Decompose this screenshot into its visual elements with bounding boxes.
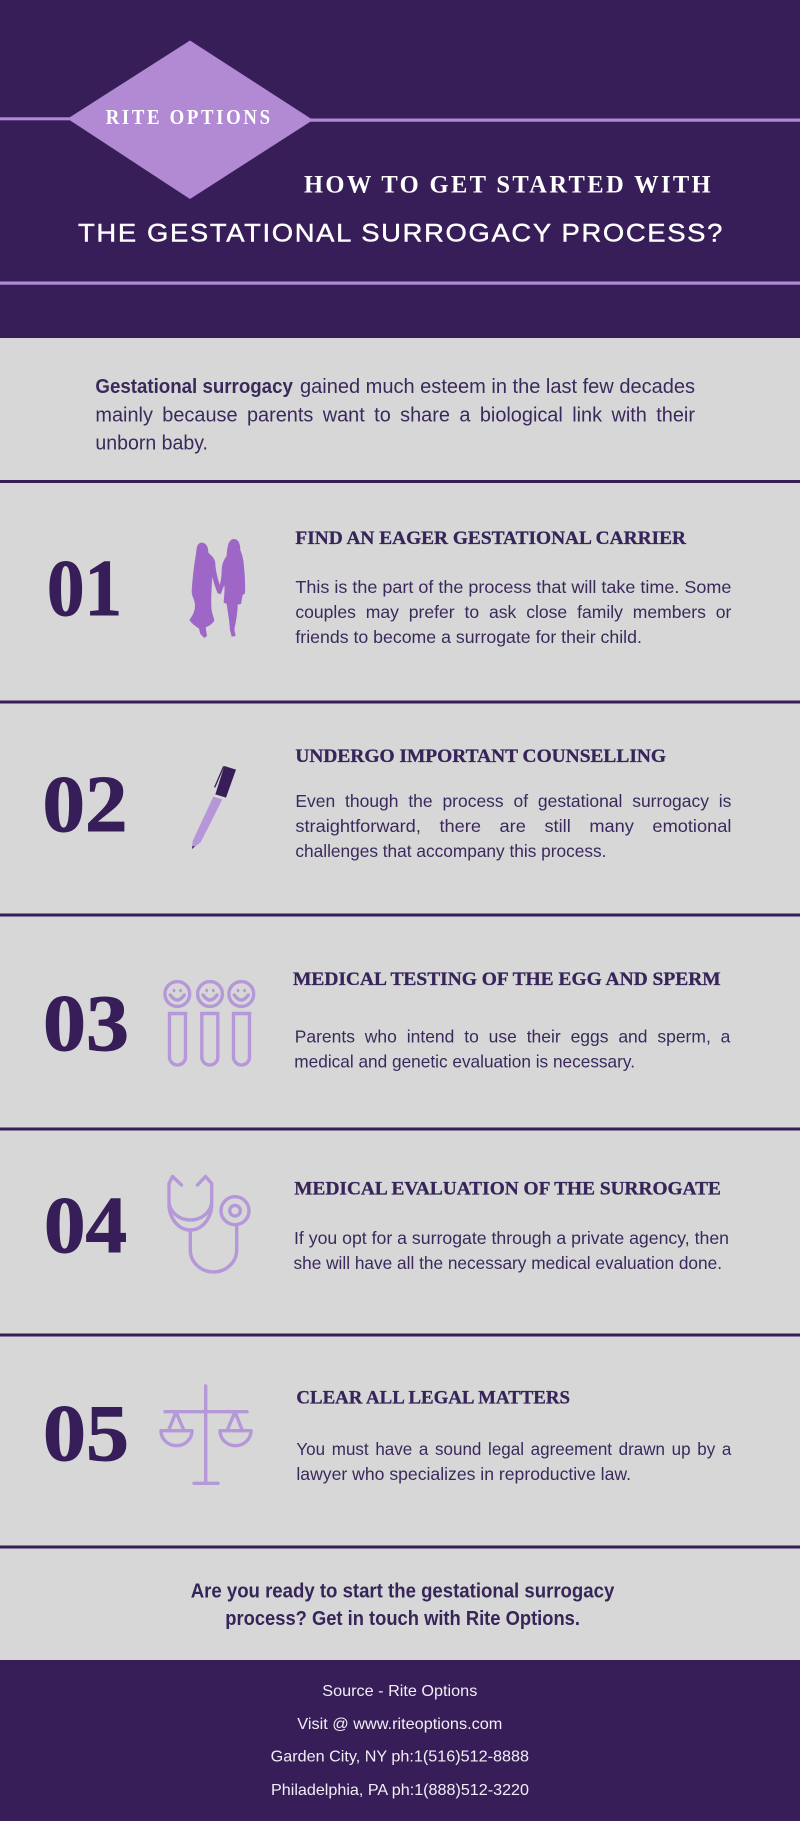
step number 01: 01 [47, 543, 122, 633]
panel: footer: Garden City, NY ph:1(516)512-8888 [271, 1749, 529, 1766]
step description [294, 1228, 729, 1273]
step number 02: 02 [42, 759, 128, 849]
logo diamond: RITE OPTIONS [106, 105, 273, 129]
step heading: FIND AN EAGER GESTATIONAL CARRIER [295, 528, 686, 549]
panel: call to action [0, 1548, 800, 1660]
icon: stethoscope [169, 1176, 249, 1272]
step description [295, 577, 732, 647]
panel: step 2 [0, 704, 800, 914]
step description: Even though the process of gestational surrogacy is [295, 791, 732, 811]
panel: step 1 [0, 483, 800, 701]
step number 04: 04 [44, 1180, 127, 1270]
icon: two women holding hands [189, 539, 245, 638]
panel: header [0, 0, 800, 338]
step description: she will have all the necessary medical evaluation done. [294, 1253, 722, 1273]
step description [294, 1026, 731, 1071]
panel: footer: Visit @ www.riteoptions.com [297, 1716, 502, 1733]
step heading: UNDERGO IMPORTANT COUNSELLING [295, 746, 666, 767]
step description: This is the part of the process that will take time. Some [295, 577, 731, 597]
panel: step 5 [0, 1336, 800, 1546]
step description: If you opt for a surrogate through a private agency, then [294, 1228, 729, 1248]
panel: footer: Philadelphia, PA ph:1(888)512-3220 [271, 1782, 529, 1799]
panel: introduction: unborn baby. [95, 432, 208, 454]
step heading: CLEAR ALL LEGAL MATTERS [296, 1388, 570, 1409]
step description: Parents who intend to use their eggs and sperm, a [295, 1026, 731, 1046]
step heading: MEDICAL TESTING OF THE EGG AND SPERM [293, 969, 721, 990]
icon: pen [192, 766, 236, 849]
panel: introduction [0, 338, 800, 480]
icon: scales of justice [161, 1386, 251, 1483]
panel: call to action: process? Get in touch with Rite Options. [225, 1608, 580, 1630]
step description: medical and genetic evaluation is necessary. [294, 1051, 635, 1071]
step description: lawyer who specializes in reproductive law. [296, 1464, 631, 1484]
panel: step 4 [0, 1130, 800, 1334]
step number 03: 03 [43, 978, 129, 1068]
logo diamond [68, 40, 313, 199]
step description: friends to become a surrogate for their child. [295, 627, 642, 647]
step description [296, 1439, 732, 1484]
step heading: MEDICAL EVALUATION OF THE SURROGATE [294, 1178, 721, 1199]
step description: straightforward, there are still many emotional [295, 816, 731, 836]
step number 05: 05 [43, 1388, 129, 1478]
icon: three smiling test tubes [165, 982, 254, 1065]
title line two: THE GESTATIONAL SURROGACY PROCESS? [78, 220, 724, 248]
panel: footer [0, 1660, 800, 1821]
step description: challenges that accompany this process. [295, 841, 606, 861]
panel: introduction: Gestational surrogacy [95, 375, 293, 398]
step description [295, 791, 732, 861]
title line one: HOW TO GET STARTED WITH [304, 172, 713, 199]
panel: step 3 [0, 916, 800, 1128]
panel: footer: Source - Rite Options [322, 1683, 477, 1700]
panel: introduction: mainly because parents want to share a biological link with their [95, 404, 695, 426]
step description: couples may prefer to ask close family members or [295, 602, 732, 622]
step description: You must have a sound legal agreement drawn up by a [296, 1439, 732, 1459]
panel: introduction: gained much esteem in the last few decades [300, 375, 695, 398]
panel: call to action: Are you ready to start the gestational surrogacy [191, 1581, 615, 1603]
